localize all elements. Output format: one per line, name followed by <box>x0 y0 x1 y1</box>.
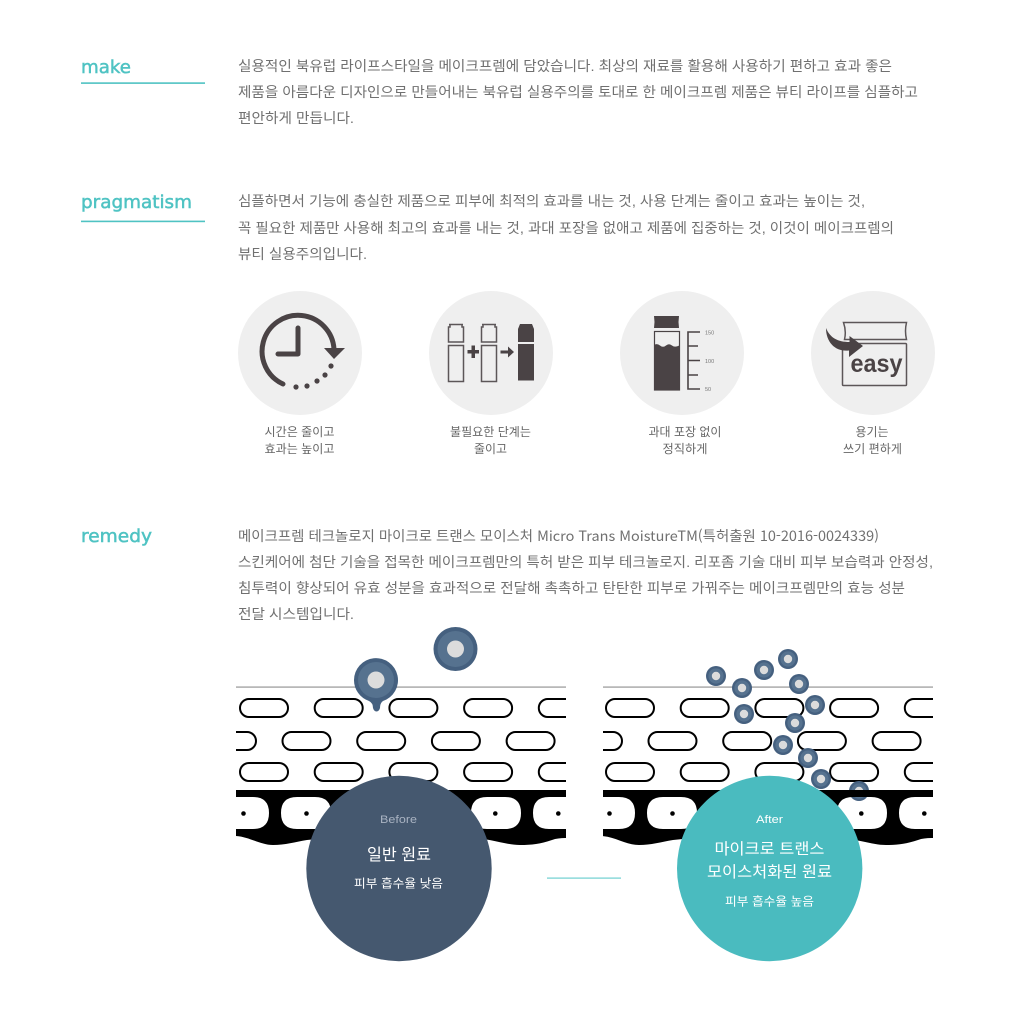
caption: jar: 정직하게 <box>662 442 708 456</box>
badge: after: 마이크로 트랜스 <box>714 840 824 858</box>
text block: pragmatism description: 꼭 필요한 제품만 사용해 최고의 효과를 내는 것, 과대 포장을 없애고 제품에 집중하는 것, 이것이 메이크프렘의 <box>238 220 894 236</box>
badge: after <box>677 776 862 961</box>
text block: remedy description: 스킨케어에 첨단 기술을 접목한 메이크프렘만의 특허 받은 피부 테크놀로지. 리포좀 기술 대비 피부 보습력과 안정성, <box>238 554 933 570</box>
caption: jar <box>648 425 722 456</box>
icon: clock with arrow <box>238 291 362 415</box>
diagram: before skin <box>236 627 566 845</box>
section: pragmatism <box>81 192 935 456</box>
caption: easy: 용기는 <box>856 425 888 439</box>
text block: remedy description <box>238 526 933 622</box>
badge: before: Before <box>380 814 417 826</box>
icon: jar with measure: 100 <box>705 359 714 365</box>
icon: jar with measure <box>620 291 744 415</box>
icon: easy open package: easy <box>850 350 903 378</box>
icon: easy open package <box>811 291 935 415</box>
heading: make: make <box>81 57 131 78</box>
text block: make description <box>238 58 918 126</box>
section: make <box>81 57 918 126</box>
caption: easy: 쓰기 편하게 <box>843 442 902 456</box>
caption: bottles <box>450 425 531 456</box>
particle: large above skin <box>434 627 478 671</box>
heading: pragmatism <box>81 192 205 222</box>
caption: clock: 효과는 높이고 <box>264 442 334 456</box>
caption: easy <box>843 425 902 456</box>
text block: pragmatism description: 심플하면서 기능에 충실한 제품으로 피부에 최적의 효과를 내는 것, 사용 단계는 줄이고 효과는 높이는 것, <box>238 193 865 209</box>
small particles <box>706 649 869 801</box>
icon: jar with measure: 150 <box>705 330 714 336</box>
text block: make description: 실용적인 북유럽 라이프스타일을 메이크프렘에 담았습니다. 최상의 재료를 활용해 사용하기 편하고 효과 좋은 <box>238 58 892 74</box>
badge: before: 피부 흡수율 낮음 <box>354 876 443 890</box>
badge: after: After <box>756 814 783 826</box>
section: remedy <box>81 526 953 961</box>
badge: after: 피부 흡수율 높음 <box>725 894 814 908</box>
text block: pragmatism description <box>238 193 894 262</box>
icon: two bottles become one <box>429 291 553 415</box>
heading: pragmatism: pragmatism <box>81 192 192 213</box>
text block: make description: 편안하게 만듭니다. <box>238 110 354 126</box>
connector line <box>547 878 621 879</box>
text block: make description: 제품을 아름다운 디자인으로 만들어내는 북유럽 실용주의를 토대로 한 메이크프렘 제품은 뷰티 라이프를 심플하고 <box>238 84 918 100</box>
text block: pragmatism description: 뷰티 실용주의입니다. <box>238 246 367 262</box>
caption: bottles: 줄이고 <box>474 442 507 456</box>
particle: large on skin surface <box>354 658 398 712</box>
caption: jar: 과대 포장 없이 <box>648 425 722 439</box>
diagram: after skin <box>603 649 933 845</box>
caption: clock <box>264 425 334 456</box>
badge: before <box>306 776 492 961</box>
badge: after: 모이스처화된 원료 <box>707 863 832 881</box>
caption: bottles: 불필요한 단계는 <box>450 425 531 439</box>
text block: remedy description: 메이크프렘 테크놀로지 마이크로 트랜스 모이스처 Micro Trans MoistureTM( 특허출원 10-2016-0024339) <box>238 526 879 546</box>
badge: before: 일반 원료 <box>367 846 431 864</box>
icon: jar with measure: 50 <box>705 387 711 393</box>
text block: remedy description: 침투력이 향상되어 유효 성분을 효과적으로 전달해 촉촉하고 탄탄한 피부로 가꿔주는 메이크프렘만의 효능 성분 <box>238 580 905 596</box>
heading: remedy: remedy <box>81 526 152 547</box>
heading: make <box>81 57 205 84</box>
caption: clock: 시간은 줄이고 <box>264 425 334 439</box>
text block: remedy description: 전달 시스템입니다. <box>238 606 354 622</box>
